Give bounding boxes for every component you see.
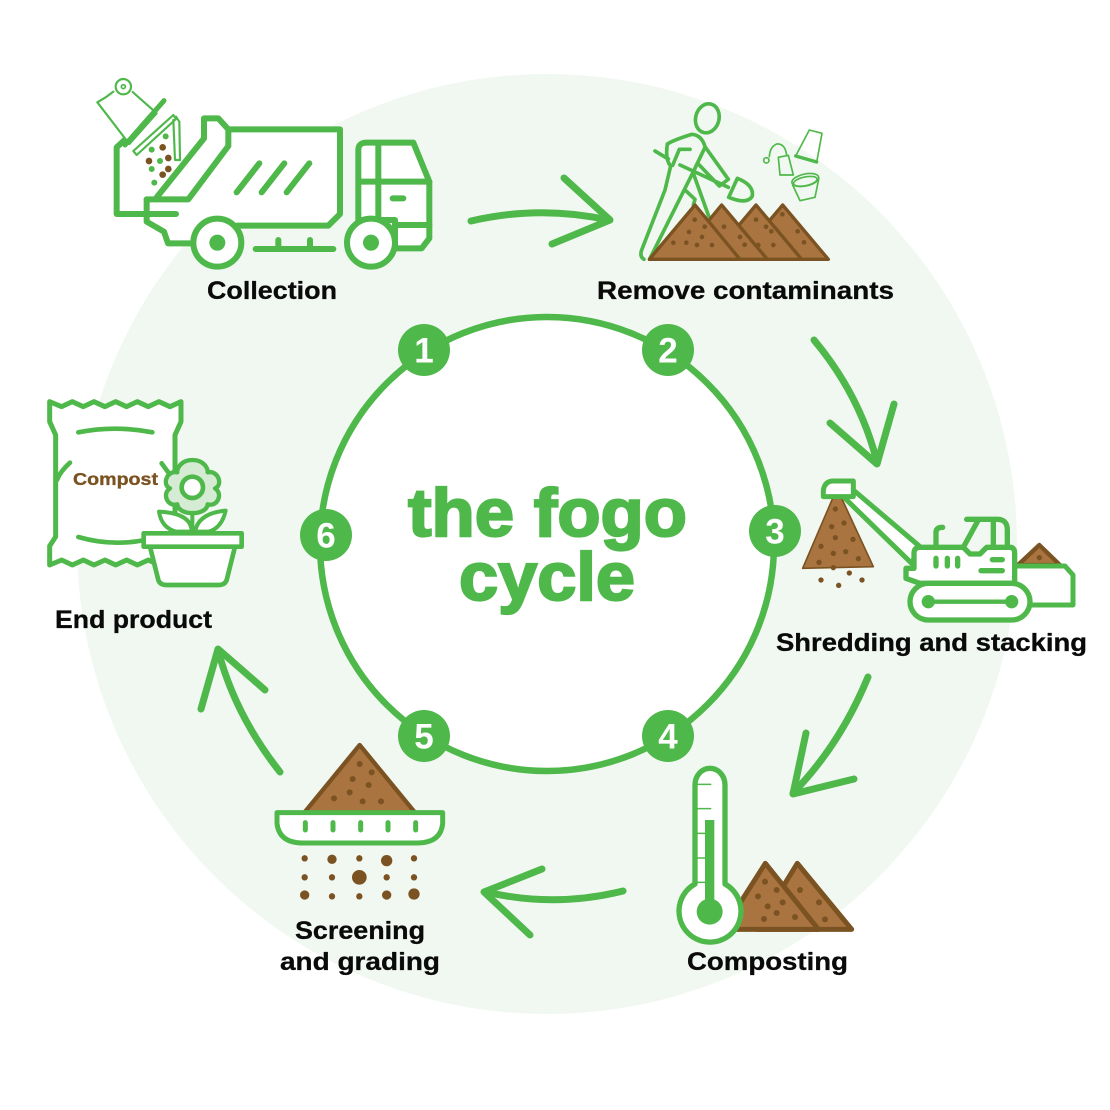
label: Screening and grading <box>280 917 440 976</box>
rear bin <box>1017 566 1073 605</box>
label: End product: End product <box>55 606 213 634</box>
arrow: shredding to composting <box>793 677 868 794</box>
label: Screening and grading: and grading <box>280 948 440 976</box>
flower <box>166 460 219 513</box>
title: the fogo <box>408 475 687 551</box>
arrow: remove contaminants to shredding <box>814 340 894 464</box>
icon: garbage truck <box>97 79 429 267</box>
flower leaves and stem <box>159 507 226 532</box>
container <box>228 129 340 226</box>
step badge 2: 2 <box>658 332 678 370</box>
step badge 5 <box>398 710 450 762</box>
icon: screen with compost pile <box>277 745 443 900</box>
step badge 4 <box>642 710 694 762</box>
label: Collection: Collection <box>207 277 337 305</box>
step badge 1 <box>398 324 450 376</box>
truck cab <box>358 143 429 248</box>
arrow: screening to end product <box>201 649 280 772</box>
step badge 4: 4 <box>658 718 678 756</box>
small pile behind <box>1018 545 1060 565</box>
label: Shredding and stacking: Shredding and stacking <box>776 629 1087 657</box>
title <box>408 475 687 615</box>
crawler track <box>910 583 1030 620</box>
step badge 1: 1 <box>414 332 434 370</box>
compost piles <box>649 205 828 259</box>
label: Screening and grading: Screening <box>295 917 425 945</box>
waste bin <box>97 92 157 144</box>
container window strokes <box>237 163 309 192</box>
icon: shredder and stacking conveyor <box>803 481 1073 620</box>
icon: worker removing contaminants <box>641 101 828 259</box>
conveyor <box>845 490 920 563</box>
icon: thermometer with compost piles <box>679 768 852 942</box>
label: Composting: Composting <box>687 948 848 976</box>
step badge 3: 3 <box>765 512 785 552</box>
bumper <box>147 199 193 243</box>
icon: compost bag with potted flower <box>50 402 242 585</box>
truck white fill <box>117 118 340 243</box>
shovel <box>729 178 752 201</box>
screened particles <box>300 855 420 900</box>
step badge 2 <box>642 324 694 376</box>
falling waste <box>146 133 172 186</box>
screen tray <box>277 813 443 843</box>
pile <box>304 745 416 813</box>
central cycle ring <box>320 317 774 771</box>
rear body outline <box>117 133 176 214</box>
flower pot <box>150 547 235 585</box>
stacked pile <box>803 498 873 568</box>
hopper <box>147 118 228 199</box>
truck wheels <box>193 219 241 267</box>
bag label: Compost <box>73 469 158 489</box>
title: cycle <box>459 539 635 615</box>
step badge 6: 6 <box>316 516 336 556</box>
compost bag <box>50 402 181 565</box>
step badge 6 <box>300 509 352 561</box>
thermometer <box>679 768 741 942</box>
label: Remove contaminants: Remove contaminants <box>597 277 894 305</box>
contaminants: tea bag, cup, pot <box>764 130 822 201</box>
machine body <box>906 547 1015 583</box>
arrow: collection to remove contaminants <box>471 178 610 244</box>
background circle <box>77 74 1017 1014</box>
step badge 5: 5 <box>414 718 434 756</box>
arrow: composting to screening <box>484 869 623 935</box>
worker figure <box>641 101 728 259</box>
piles <box>723 863 852 929</box>
step badge 3 <box>749 505 801 557</box>
